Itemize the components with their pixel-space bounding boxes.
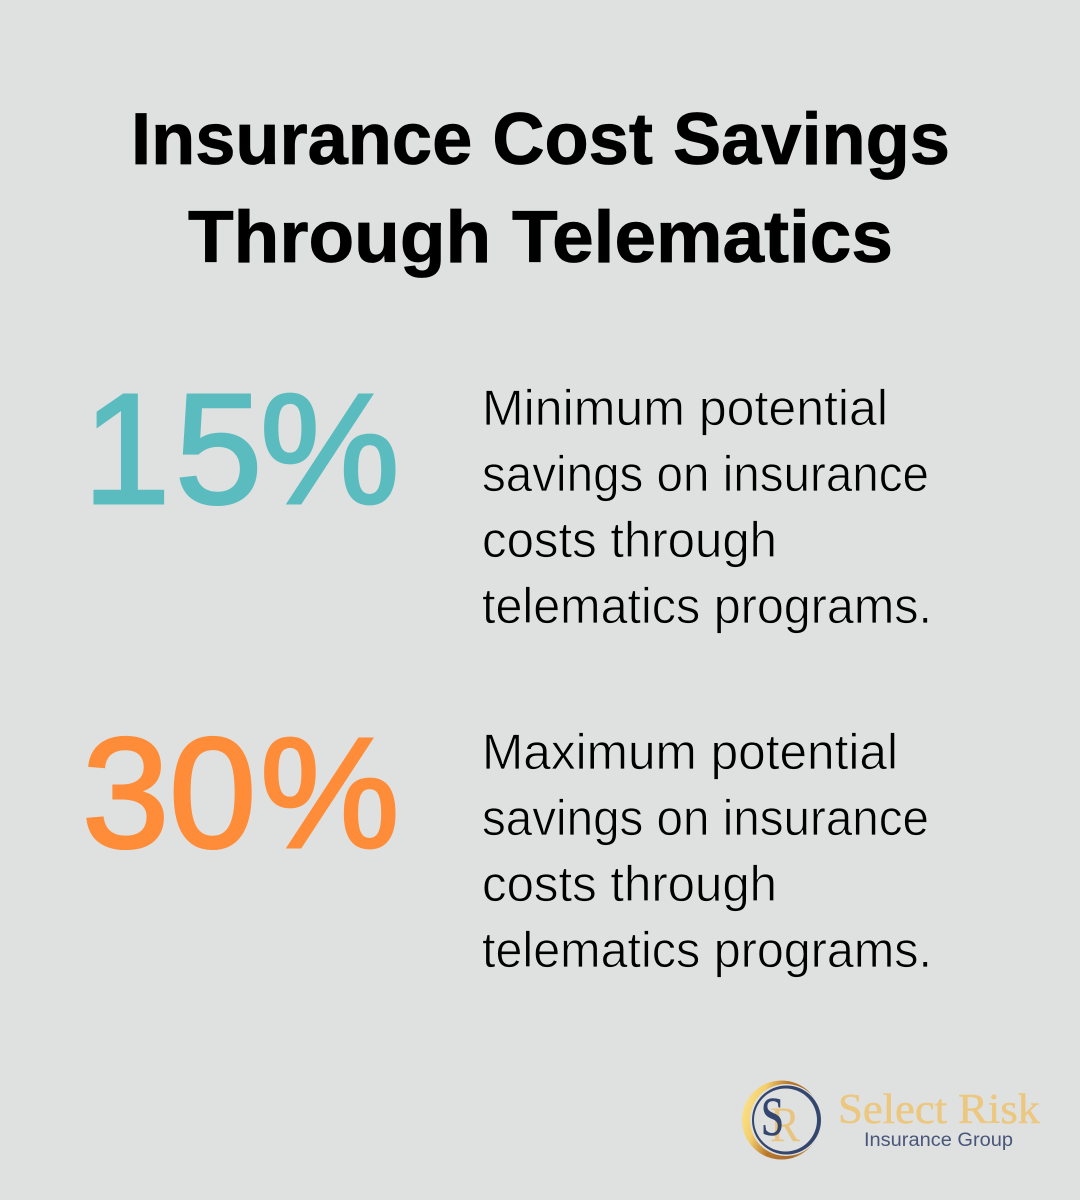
text: maximum savings description [482, 724, 932, 978]
icon: SR monogram ring [742, 1080, 822, 1160]
tagline: Insurance Group [864, 1130, 1013, 1151]
title: Through Telematics [188, 197, 893, 278]
text: minimum savings description: savings on insurance [482, 446, 929, 502]
stat: 15%: 15% [83, 362, 400, 537]
text: minimum savings description: Minimum potential [482, 380, 888, 436]
icon: SR monogram ring: R [770, 1096, 801, 1152]
title [131, 99, 950, 278]
icon: SR monogram ring: S [761, 1086, 784, 1147]
text: maximum savings description: Maximum potential [482, 724, 898, 780]
text: minimum savings description: costs through [482, 512, 777, 568]
text: maximum savings description: telematics programs. [482, 922, 932, 978]
text: maximum savings description: costs through [482, 856, 777, 912]
text: minimum savings description: telematics programs. [482, 578, 932, 634]
title: Insurance Cost Savings [131, 99, 950, 180]
wordmark: Select Risk [838, 1087, 1040, 1133]
stat: 30%: 30% [82, 706, 400, 881]
text: minimum savings description [482, 380, 932, 634]
logo: Select Risk Insurance Group [742, 1080, 1040, 1160]
panel: maximum savings [82, 706, 932, 978]
text: maximum savings description: savings on insurance [482, 790, 929, 846]
panel: minimum savings [83, 362, 932, 634]
